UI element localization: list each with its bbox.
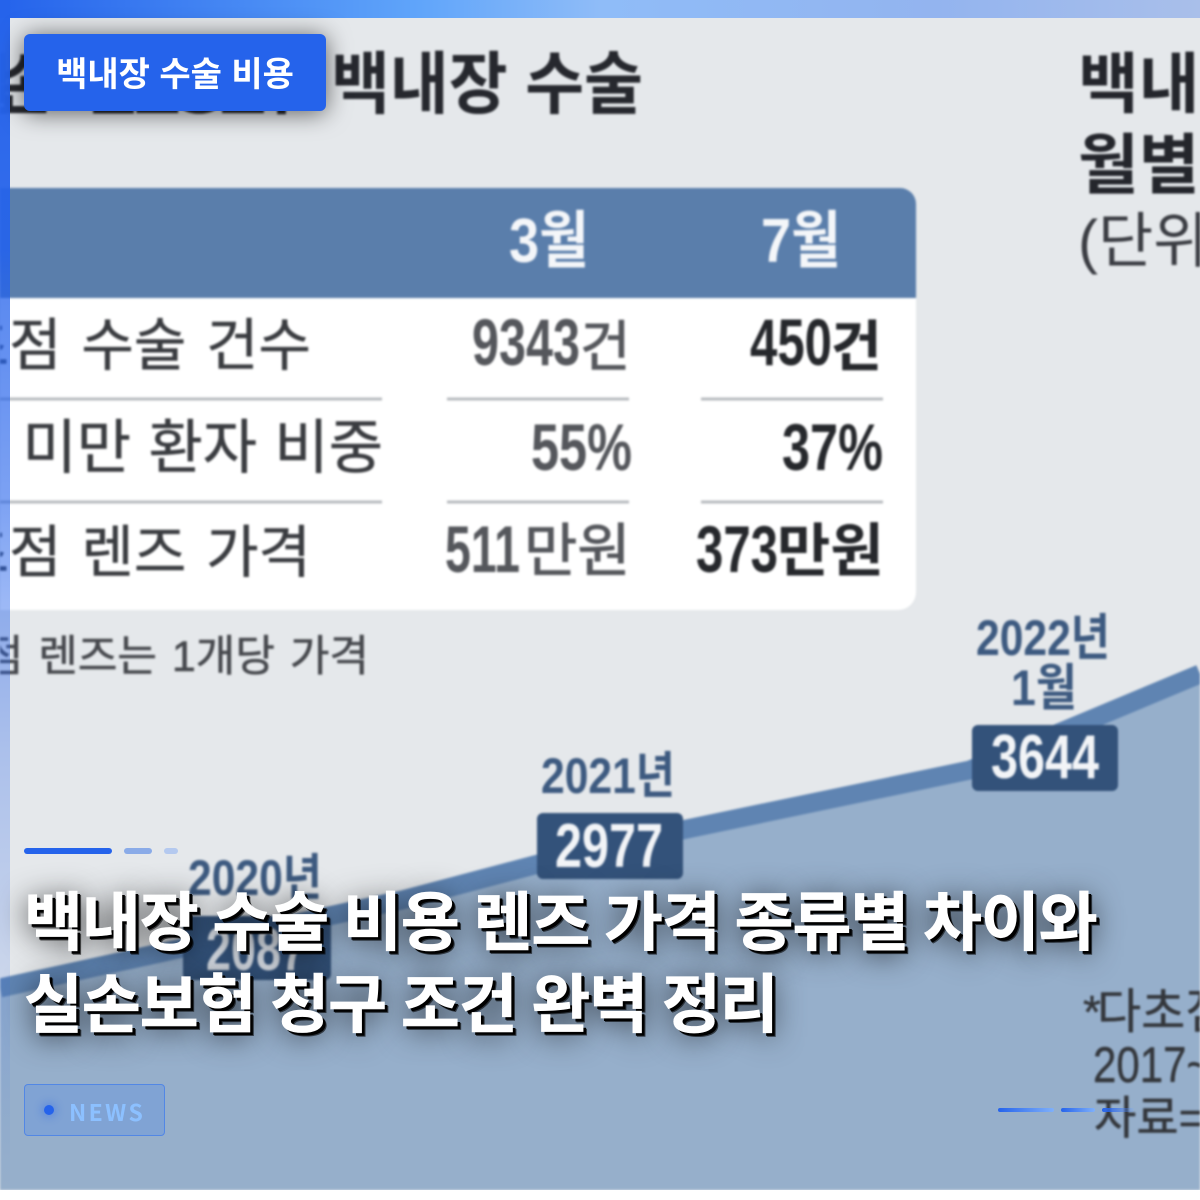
table column 3월 values: 만원 <box>524 519 631 584</box>
chart: area growth <box>0 674 1200 1190</box>
main title <box>8 875 1113 1058</box>
data label 2021: 2977 <box>555 812 663 881</box>
data label 2020 <box>183 850 331 983</box>
data label 2021 <box>537 748 683 881</box>
top accent bar <box>0 0 1200 18</box>
source notes <box>1083 986 1200 1144</box>
data label 2022: 2022년 <box>976 610 1110 666</box>
table column 3월 values: 55% <box>531 410 632 484</box>
source notes: * <box>1083 986 1101 1038</box>
table column 3월 values <box>445 305 632 586</box>
left accent bar <box>0 0 10 1190</box>
table column 7월 values: 만원 <box>777 519 884 584</box>
table column 3월 values: 511 <box>445 512 520 586</box>
data label 2020: 2087 <box>206 916 306 983</box>
table column 7월 values: 373 <box>696 512 778 586</box>
main title: 백내장 수술 비용 렌즈 가격 종류별 차이와 <box>24 887 1097 959</box>
data label 2020: 2020년 <box>188 850 322 906</box>
progress dashes <box>24 848 178 854</box>
table header: 3월 <box>509 207 589 276</box>
table panel <box>0 188 916 610</box>
table row labels <box>0 314 383 585</box>
main title: 실손보험 청구 조건 완벽 정리 <box>24 969 778 1041</box>
heading: left: 백내장 수술 <box>331 47 643 123</box>
data label 2021: 2021년 <box>541 748 675 804</box>
badge: category <box>24 34 326 111</box>
table column 3월 values: 건 <box>580 316 631 378</box>
data label 2022: 3644 <box>991 723 1099 792</box>
decorative gradient lines <box>998 1108 1134 1112</box>
data label 2022: 1월 <box>1011 660 1077 716</box>
table column 7월 values <box>696 305 884 586</box>
table column 7월 values: 건 <box>831 316 882 378</box>
table column 7월 values: 37% <box>782 410 883 484</box>
table column 7월 values: 450 <box>750 305 832 379</box>
heading: right: 월별 <box>1078 128 1199 202</box>
table header: 7월 <box>761 207 841 276</box>
news tag <box>24 1084 165 1136</box>
heading: right <box>1078 47 1200 275</box>
data label 2022 <box>972 610 1118 792</box>
table column 3월 values: 9343 <box>472 305 580 379</box>
badge: category: 백내장 수술 비용 <box>56 56 294 94</box>
news tag: NEWS <box>69 1094 145 1128</box>
table header <box>509 207 841 276</box>
